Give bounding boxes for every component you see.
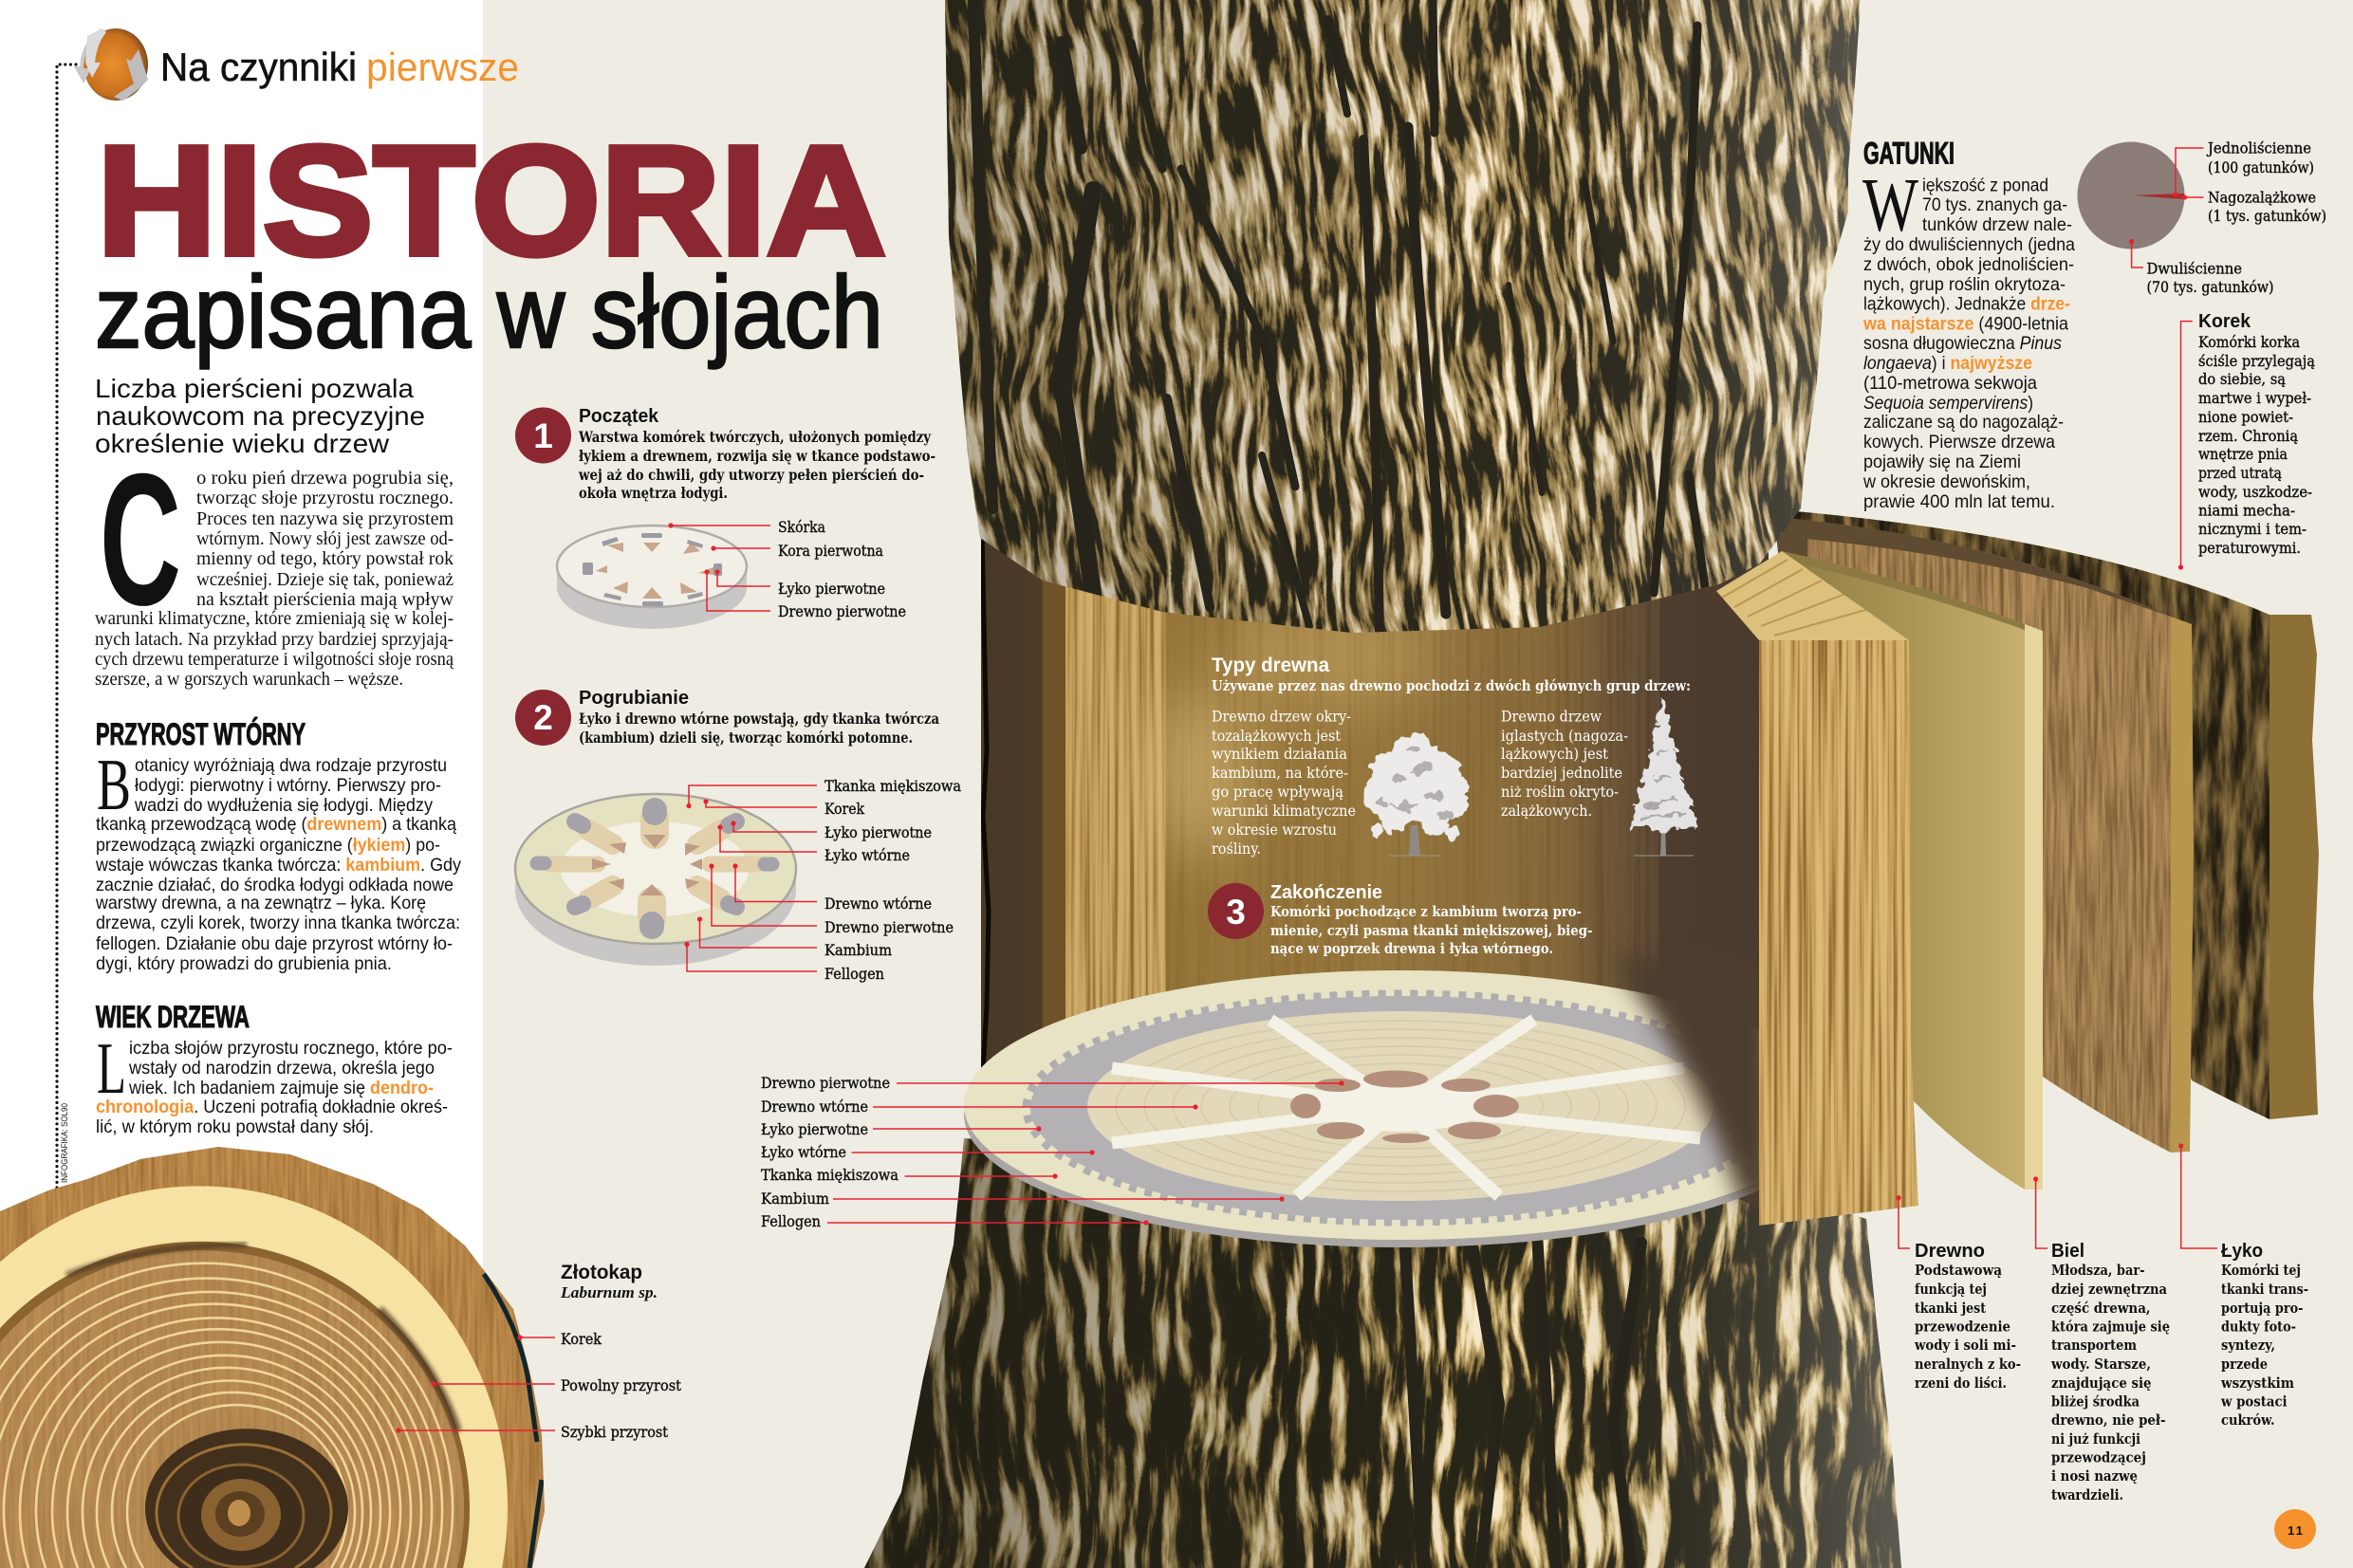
text block: gatunki: zaliczane są do nagozaląż- [1863,412,2064,433]
step 2 badge [515,690,571,746]
illustration: peeled bark layers [1765,503,2319,1190]
pie chart: species by group [2078,142,2184,249]
slice callouts [396,1331,682,1441]
callouts: thickening stem: Drewno wtórne [824,895,932,913]
text block: gatunki: z dwóch, obok jednoliścien- [1863,254,2074,275]
text block: przyrost wtórny: zacznie działać, do środka łodygi odkłada nowe [96,875,454,895]
callout: korek: rzem. Chronią [2198,428,2298,445]
callout: drewno: przewodzenie [1915,1319,2010,1336]
callouts: thickening stem: Fellogen [824,966,884,983]
callout: łyko: przede [2221,1356,2268,1373]
callout: biel: drewno, nie peł- [2051,1412,2166,1429]
text block: przyrost wtórny: wstaje wówczas tkanka twórcza: kambium. Gdy [95,855,461,876]
text block: gatunki: W [1862,164,1918,248]
step 3 text: nące w poprzek drewna i łyka wtórnego. [1270,940,1553,957]
intro text block with drop cap: warunki klimatyczne, które zmieniają się w kolej- [95,608,454,629]
callout: biel: przewodzącej [2051,1449,2146,1467]
callout: drewno: tkanki jest [1915,1301,1986,1317]
step 1 text: Warstwa komórek twórczych, ułożonych pomiędzy [578,428,932,446]
callouts: cross-section disc: Tkanka miękiszowa [761,1167,899,1184]
callout: biel: dziej zewnętrzna [2051,1282,2168,1298]
step 1 text: okoła wnętrza łodygi. [579,484,728,502]
text: angiosperm wood: go pracę wpływają [1212,783,1343,801]
callout: biel: która zajmuje się [2051,1319,2170,1336]
species latin name: Laburnum sp. [560,1283,658,1301]
pie chart callouts: Nagozalążkowe [2208,190,2316,207]
text block: przyrost wtórny: łodygi: pierwotny i wtórny. Pierwszy pro- [135,775,441,796]
callout: korek: peraturowymi. [2198,540,2301,557]
slice callouts: Powolny przyrost [561,1377,682,1394]
text block: przyrost wtórny: B [97,744,131,825]
section label: Na czynniki [160,45,357,89]
callouts: cross-section disc: Kambium [761,1190,829,1208]
intro text block with drop cap: o roku pień drzewa pogrubia się, [196,468,454,489]
pie chart callouts: (70 tys. gatunków) [2146,279,2273,296]
text block: wiek drzewa [96,1027,453,1137]
callouts: primary stem: Skórka [778,519,825,536]
step 1 text: łykiem a drewnem, rozwija się w tkance podstawo- [579,447,936,465]
text block: gatunki: (110-metrowa sekwoja [1863,373,2037,394]
text block: gatunki: lążkowych). Jednakże drze- [1863,294,2070,315]
callouts: thickening stem: Łyko wtórne [824,847,910,864]
step 2 badge: 2 [533,698,553,737]
page number badge: 11 [2288,1523,2303,1538]
callout: biel: i nosi nazwę [2051,1468,2138,1485]
text block: gatunki: longaeva) i najwyższe [1863,353,2032,374]
pie chart callouts: Dwuliścienne [2146,261,2242,278]
callout: łyko: dukty foto- [2221,1319,2296,1336]
intro text block with drop cap [95,434,454,690]
text block: gatunki: Sequoia sempervirens) [1863,393,2033,414]
callout: drewno: rzeni do liści. [1915,1375,2007,1392]
slice callouts: Korek [561,1331,602,1348]
text block: gatunki: wa najstarsze (4900-letnia [1862,313,2068,334]
text: conifer wood: Drewno drzew [1501,708,1602,725]
callout: łyko: tkanki trans- [2221,1282,2308,1298]
callout: korek: wnętrze pnia [2198,446,2288,463]
callouts: thickening stem: Łyko pierwotne [824,824,932,841]
callout: łyko: cukrów. [2221,1412,2275,1429]
step 2 heading: Pogrubianie [579,688,689,709]
illustration: upper trunk bark [945,0,1861,633]
illustration: tree slice with growth rings [0,1138,550,1568]
callout: biel [2033,1176,2170,1503]
text block: gatunki: tunków drzew nale- [1922,214,2072,235]
text block: przyrost wtórny: przewodzącą związki organiczne (łykiem) po- [96,835,440,856]
callout: korek: wody, uszkodze- [2198,484,2312,501]
intro text block with drop cap: na kształt pierścienia mają wpływ [196,589,454,610]
text block: gatunki: iększość z ponad [1922,175,2048,195]
callout: korek: Komórki korka [2198,334,2300,351]
step 3 badge [1208,883,1264,939]
diagram: thickening stem disc [515,794,796,966]
callout: korek: nicznymi i tem- [2198,521,2307,538]
text block: przyrost wtórny: warstwy drewna, a na zewnątrz – łyka. Korę [95,893,426,913]
callout: drewno: Drewno [1915,1241,1985,1262]
text: angiosperm wood: w okresie wzrostu [1212,821,1337,839]
callout: drewno: neralnych z ko- [1915,1356,2021,1373]
callout: korek: do siebie, są [2198,371,2286,388]
callout: łyko: w postaci [2220,1394,2288,1410]
intro text block with drop cap: wtórnym. Nowy słój jest zawsze od- [196,528,454,549]
callout: biel: znajdujące się [2051,1375,2152,1392]
step 1 heading: Początek [579,406,659,427]
text: conifer wood: zalążkowych. [1501,802,1592,820]
text block: wiek drzewa: chronologia. Uczeni potrafią dokładnie okreś- [96,1097,448,1117]
intro text block with drop cap: mienny od tego, który powstał rok [196,548,454,569]
text: conifer wood: lążkowych) jest [1501,745,1609,763]
pie chart callouts: Jednoliścienne [2206,139,2311,157]
step 1 text: wej aż do chwili, gdy utworzy pełen pierścień do- [578,466,924,484]
text block: gatunki: ży do dwuliściennych (jedna [1863,234,2075,255]
intro text block with drop cap: cych drzewu temperaturze i wilgotności słoje rosną [95,649,454,670]
layer: biel [1782,551,2043,1190]
heading: gatunki: GATUNKI [1863,137,1955,171]
illustration: lower trunk bark [854,1119,1907,1568]
text: conifer wood: iglastych (nagoza- [1501,727,1628,745]
callout: biel: Biel [2051,1241,2084,1262]
heading: wood types: Typy drewna [1212,655,1329,676]
step 2 text [579,710,939,747]
callout: biel: transportem [2051,1337,2138,1354]
step 1 badge [515,408,571,463]
background: white column [0,0,483,1568]
callout: korek: martwe i wypeł- [2198,390,2311,407]
text block: przyrost wtórny: wadzi do wydłużenia się łodygi. Między [134,795,433,816]
step 1 text [578,428,936,502]
callouts: cross-section disc: Drewno pierwotne [761,1075,890,1092]
text: conifer wood: niż roślin okryto- [1501,783,1619,801]
callout: łyko [2178,1143,2308,1429]
lead paragraph: Liczba pierścieni pozwala [95,374,415,403]
text block: wiek drzewa: iczba słojów przyrostu rocznego, które po- [129,1038,453,1059]
text block: przyrost wtórny: otanicy wyróżniają dwa rodzaje przyrostu [135,755,447,776]
callouts: cross-section disc: Łyko pierwotne [761,1121,868,1138]
step 3 text: Komórki pochodzące z kambium tworzą pro- [1270,903,1582,920]
text: angiosperm wood: wynikiem działania [1212,745,1347,763]
callout: drewno [1896,1195,2021,1392]
step 3 badge: 3 [1226,893,1246,932]
pie chart callouts [2129,139,2326,296]
callouts: primary stem: Kora pierwotna [778,543,883,560]
title: HISTORIA [97,114,886,287]
icon: deciduous tree [1362,734,1469,856]
step 3 text: mienie, czyli pasma tkanki miękiszowej, bieg- [1270,922,1592,939]
intro text block with drop cap: tworząc słoje przyrostu rocznego. [196,488,454,508]
callout: korek: przed utratą [2198,465,2282,482]
text block: przyrost wtórny: fellogen. Działanie obu daje przyrost wtórny ło- [96,933,453,954]
text block: wiek drzewa: wiek. Ich badaniem zajmuje się dendro- [128,1078,434,1098]
text: angiosperm wood: rośliny. [1212,839,1261,858]
callout: łyko: wszystkim [2220,1375,2295,1392]
callouts: cross-section disc: Drewno wtórne [761,1098,868,1116]
text block: gatunki: w okresie dewońskim, [1862,471,2030,492]
step 3 text [1270,903,1592,957]
species name: Złotokap [561,1262,642,1283]
callout: drewno: Podstawową [1915,1263,2003,1279]
callout: drewno: wody i soli mi- [1914,1337,2016,1354]
text block: gatunki: kowych. Pierwsze drzewa [1863,432,2055,452]
callouts: thickening stem: Tkanka miękiszowa [824,778,961,795]
callout: biel: twardzieli. [2051,1487,2123,1503]
icon: conifer tree [1630,695,1698,856]
step 1 badge: 1 [533,416,553,455]
text: conifer wood [1501,708,1628,820]
text block: przyrost wtórny: drzewa, czyli korek, tworzy inna tkanka twórcza: [96,913,460,933]
step 2 text: (kambium) dzieli się, tworząc komórki potomne. [579,729,913,747]
callouts: thickening stem: Kambium [824,942,892,959]
icon: globe with arrows [74,28,148,101]
text block: przyrost wtórny: tkanką przewodzącą wodę (drewnem) a tkanką [96,814,456,835]
heading: wiek drzewa: WIEK DRZEWA [96,1000,250,1034]
text block: gatunki [1862,164,2075,512]
heading: przyrost wtórny: PRZYROST WTÓRNY [96,717,306,751]
text: conifer wood: bardziej jednolite [1501,764,1622,782]
text block: gatunki: nych, grup roślin okrytoza- [1863,274,2066,295]
illustration: interior wall of the trunk [981,531,1769,1233]
callout: biel: Młodsza, bar- [2051,1263,2144,1279]
lead paragraph [95,374,425,458]
callouts: cross-section disc [761,1075,1344,1230]
text block: wiek drzewa: L [97,1027,126,1109]
intro text block with drop cap: Proces ten nazywa się przyrostem [196,508,454,529]
intro text block with drop cap: wcześniej. Dzieje się tak, ponieważ [196,569,454,590]
dotted rule and credit [57,65,76,1188]
step 3 heading: Zakończenie [1270,882,1382,903]
text: angiosperm wood: kambium, na które- [1212,764,1348,782]
callout: drewno: funkcją tej [1915,1282,1987,1298]
callout: łyko: portują pro- [2221,1301,2304,1317]
shadow over disc [1613,958,1774,1203]
text block: wiek drzewa: wstały od narodzin drzewa, określa jego [128,1058,435,1079]
text block: wiek drzewa: lić, w którym roku powstał dany słój. [96,1116,374,1137]
callout: łyko: Komórki tej [2221,1263,2301,1279]
illustration: wood block [1708,545,1921,1233]
callout: korek: niami mecha- [2198,503,2295,520]
callout: biel: wody. Starsze, [2050,1356,2151,1373]
wood types intro: Używane przez nas drewno pochodzi z dwóch głównych grup drzew: [1212,677,1691,694]
lead paragraph: określenie wieku drzew [95,429,389,458]
diagram: primary stem disc [557,526,747,629]
page number badge [2274,1509,2316,1549]
intro text block with drop cap: nych latach. Na przykład przy bardziej sprzyjają- [95,629,454,650]
text: angiosperm wood: warunki klimatyczne [1212,802,1356,820]
text: angiosperm wood: Drewno drzew okry- [1212,708,1351,725]
subtitle: zapisana w słojach [95,254,883,369]
intro text block with drop cap: C [100,434,181,644]
callout: korek: ściśle przylegają [2198,353,2315,370]
callout: łyko: syntezy, [2221,1337,2275,1354]
lead paragraph: naukowcom na precyzyjne [96,401,425,431]
callout: biel: ni już funkcji [2051,1431,2140,1448]
layer: łyko [1765,512,2194,1157]
step 2 text: Łyko i drewno wtórne powstają, gdy tkanka twórcza [579,710,939,728]
callout: biel: bliżej środka [2051,1394,2140,1410]
callout: korek: Korek [2198,311,2251,332]
illustration: cross-section disc [964,970,1837,1247]
text block: gatunki: prawie 400 mln lat temu. [1863,491,2055,512]
callouts: thickening stem: Drewno pierwotne [824,919,954,936]
callouts: primary stem: Łyko pierwotne [778,581,885,598]
slice callouts: Szybki przyrost [561,1424,669,1441]
text block: przyrost wtórny [95,744,461,974]
text block: gatunki: 70 tys. znanych ga- [1922,194,2067,215]
layer: korek [1765,503,2319,1129]
section label accent: pierwsze [366,45,519,89]
dotted rule and credit: INFOGRAFIKA: SOL90 [60,1103,69,1183]
callouts: primary stem [668,519,906,620]
callouts: cross-section disc: Fellogen [761,1213,821,1230]
callouts: thickening stem: Korek [824,801,865,818]
callout: łyko: Łyko [2221,1241,2263,1262]
pie chart callouts: (1 tys. gatunków) [2208,208,2326,225]
intro text block with drop cap: szersze, a w gorszych warunkach – węższe. [95,669,403,690]
callouts: cross-section disc: Łyko wtórne [761,1144,846,1161]
pie chart callouts: (100 gatunków) [2208,159,2314,176]
text: angiosperm wood: tozalążkowych jest [1212,727,1342,745]
text block: gatunki: sosna długowieczna Pinus [1863,333,2062,354]
callouts: thickening stem [684,778,961,983]
callout: biel: część drewna, [2051,1301,2151,1317]
callout: korek: nione powiet- [2198,409,2293,426]
callouts: primary stem: Drewno pierwotne [778,603,906,620]
text block: gatunki: pojawiły się na Ziemi [1863,452,2021,472]
callout: korek [2178,311,2315,570]
text block: przyrost wtórny: dygi, który prowadzi do grubienia pnia. [96,953,392,974]
text: angiosperm wood [1212,708,1356,858]
